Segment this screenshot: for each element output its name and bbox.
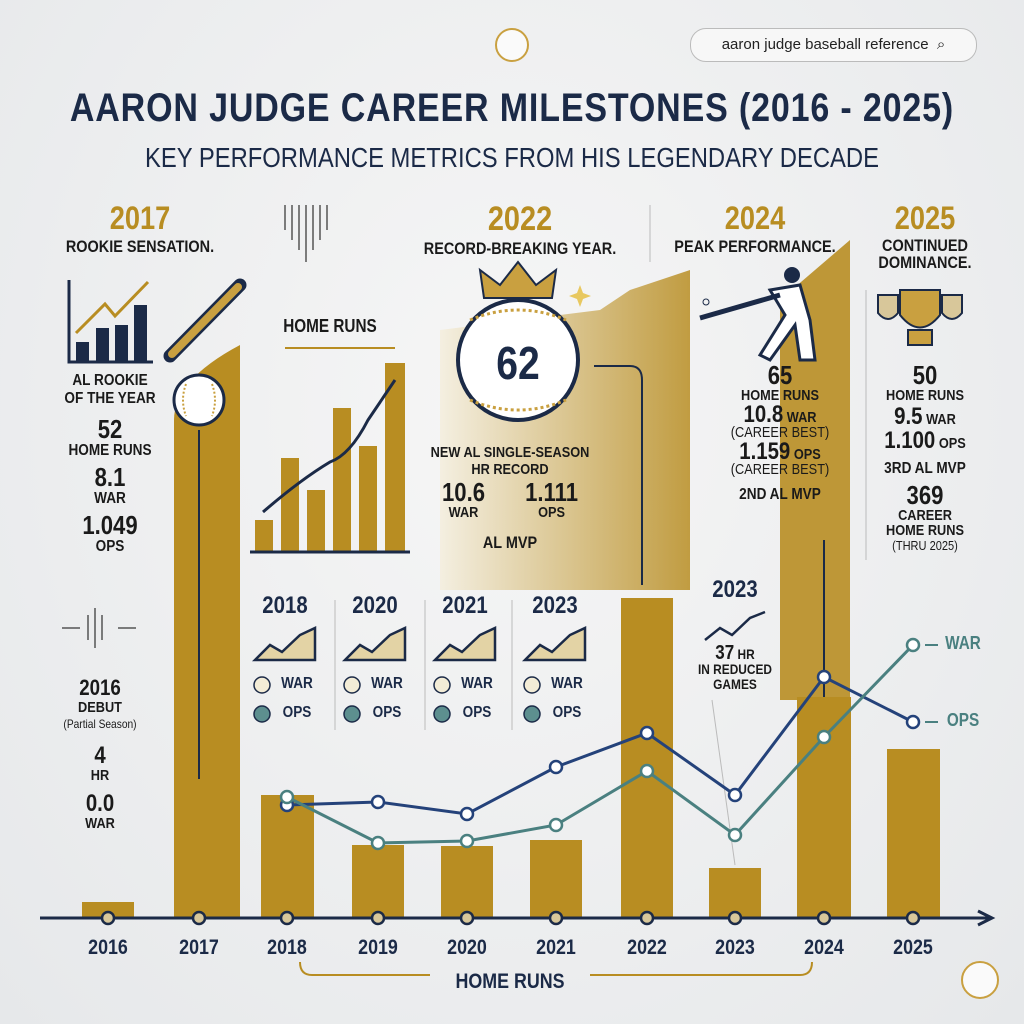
- 2016 block: 0.0: [86, 790, 114, 817]
- 2025 header: CONTINUED: [882, 236, 968, 255]
- text: 10.6: [442, 477, 485, 507]
- 2023 block: [698, 576, 772, 692]
- bat: [170, 285, 240, 356]
- text: OPS: [373, 704, 401, 721]
- 2025 stats: 1.100 OPS: [884, 427, 966, 454]
- 2017 stats: OF THE YEAR HOME RUNS WAR OPS: [64, 390, 156, 555]
- text: 2023: [532, 592, 578, 619]
- text: WAR: [449, 504, 478, 521]
- mini trend icons: [255, 612, 765, 660]
- 2023 block: 37 HR: [715, 642, 755, 664]
- 2024 stats: 65: [768, 360, 792, 390]
- x-axis labels: 2022: [627, 936, 667, 959]
- 2025 stats: 50: [913, 360, 937, 390]
- x-axis labels: 2019: [358, 936, 398, 959]
- bottom bars: [82, 598, 940, 918]
- 2016 block: 4: [94, 742, 106, 769]
- text: 2020: [352, 592, 398, 619]
- 2024 stats: 2ND AL MVP: [739, 486, 821, 503]
- 2025 stats: (THRU 2025): [892, 538, 958, 553]
- text: AL MVP: [483, 533, 537, 552]
- batter: [700, 267, 815, 360]
- text: WAR: [551, 675, 583, 692]
- 2016 block: 2016: [79, 675, 121, 700]
- x-axis labels: 2023: [715, 936, 755, 959]
- subtitle: KEY PERFORMANCE METRICS FROM HIS LEGENDARY DECADE: [145, 142, 879, 173]
- text: OPS: [463, 704, 491, 721]
- 2022 header: [424, 200, 616, 258]
- small HR bars: [255, 363, 405, 552]
- text: WAR: [371, 675, 403, 692]
- x-axis labels: 2018: [267, 936, 307, 959]
- mini year labels: 2018: [262, 592, 308, 619]
- 2025 stats: HOME RUNS CAREER: [886, 387, 964, 524]
- text: OPS: [553, 704, 581, 721]
- text: OPS: [538, 504, 565, 521]
- 2025 stats: [884, 360, 966, 553]
- WAR / OPS legends: WAR: [281, 675, 313, 692]
- top ball icons: [496, 29, 528, 61]
- line labels: WAR: [945, 633, 981, 653]
- 2024 header: 2024: [725, 200, 785, 236]
- 2024 stats: [731, 360, 829, 503]
- search pill: [690, 28, 977, 62]
- 2022 stats: [431, 444, 589, 478]
- 2017 stats: 1.049: [82, 510, 138, 540]
- home runs label: HOME RUNS: [283, 316, 377, 336]
- x-axis labels: 2016: [88, 936, 128, 959]
- 2025 stats: HOME RUNS: [886, 522, 964, 539]
- 2022 stats: NEW AL SINGLE-SEASON: [431, 444, 589, 461]
- search pill: aaron judge baseball reference ⌕: [722, 36, 945, 53]
- 2025 header: 2025: [895, 200, 955, 236]
- 2017 stats: 52: [98, 414, 122, 444]
- 2017 header: ROOKIE SENSATION.: [66, 237, 214, 256]
- 2025 stats: 369: [907, 480, 943, 510]
- x-axis labels: [88, 936, 933, 959]
- x-axis labels: 2017: [179, 936, 219, 959]
- 2016 block: DEBUT: [78, 699, 122, 716]
- 2017 header: 2017: [110, 200, 170, 236]
- 2024 stats: 10.8 WAR: [743, 401, 816, 428]
- baseball 2017: [174, 375, 224, 425]
- 2023 block: IN REDUCED: [698, 661, 772, 677]
- 2025 header: DOMINANCE.: [878, 253, 972, 272]
- 62 ball: [458, 300, 578, 420]
- x-axis labels: 2021: [536, 936, 576, 959]
- text: 1.111: [525, 477, 578, 507]
- 2023 block: 2023: [712, 576, 758, 603]
- text: 2021: [442, 592, 488, 619]
- 2022 header: RECORD-BREAKING YEAR.: [424, 239, 616, 258]
- title: AARON JUDGE CAREER MILESTONES (2016 - 2025): [70, 86, 954, 130]
- trophies: [878, 290, 962, 345]
- 2016 block: (Partial Season) HR WAR: [63, 717, 137, 832]
- 2025 stats: 9.5 WAR: [894, 403, 956, 430]
- 2024 header: PEAK PERFORMANCE.: [674, 237, 836, 256]
- 2022 header: 2022: [488, 200, 552, 238]
- 62: 62: [496, 337, 540, 389]
- x-axis labels: 2020: [447, 936, 487, 959]
- text: WAR: [461, 675, 493, 692]
- x-axis labels: 2025: [893, 936, 933, 959]
- 2025 stats: 3RD AL MVP: [884, 460, 966, 477]
- 2023 block: GAMES: [713, 676, 757, 692]
- home runs axis label: HOME RUNS: [455, 970, 565, 993]
- 2017 stats: 8.1: [95, 462, 125, 492]
- text: OPS: [947, 710, 979, 730]
- 2024 stats: 1.159 OPS: [739, 438, 821, 465]
- 2017 header: [66, 200, 214, 256]
- x-axis labels: 2024: [804, 936, 844, 959]
- 2024 header: [674, 200, 836, 256]
- 2017 stats: AL ROOKIE: [72, 372, 148, 389]
- small chart icon 2017: [69, 280, 153, 362]
- 2025 header: [878, 200, 972, 272]
- text: OPS: [283, 704, 311, 721]
- lines: [287, 677, 913, 814]
- 2022 stats: HR RECORD: [471, 461, 549, 478]
- 2024 stats: HOME RUNS (CAREER BEST) (CAREER BEST): [731, 387, 829, 478]
